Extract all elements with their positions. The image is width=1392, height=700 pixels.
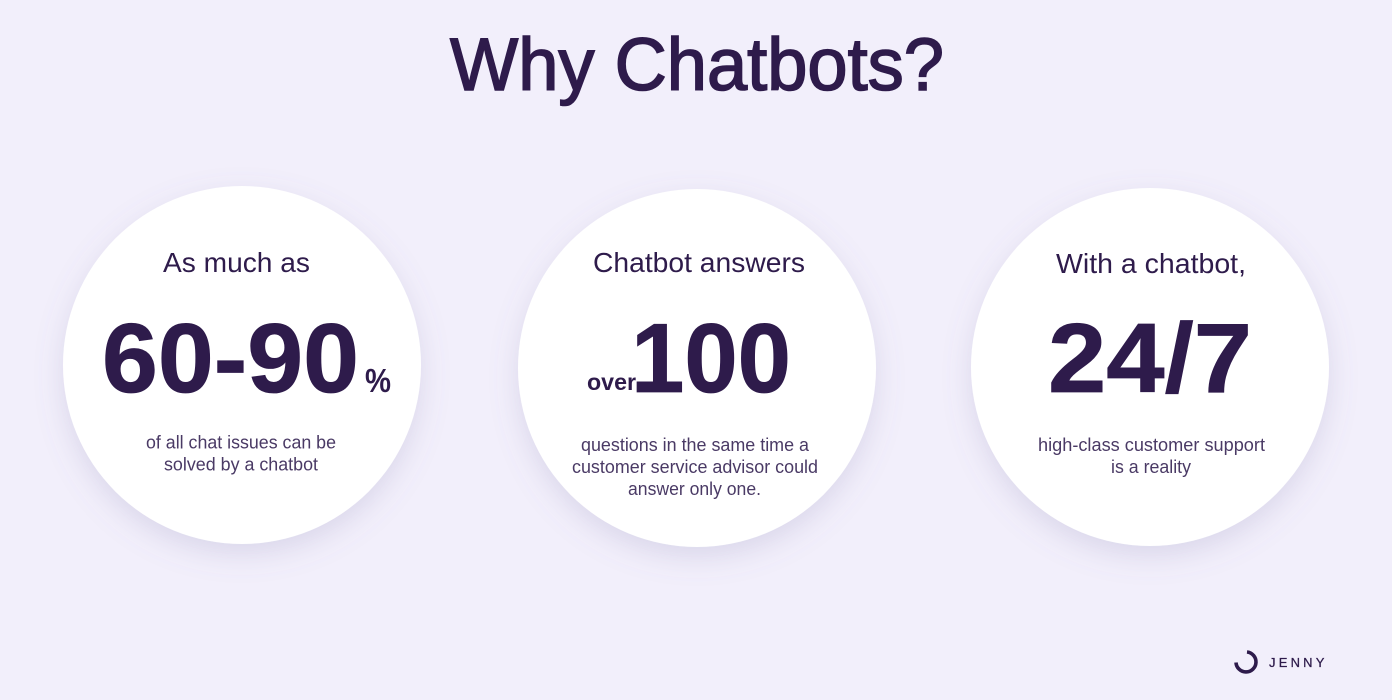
circle background (518, 189, 876, 547)
circle background (971, 188, 1329, 546)
panel: 60-90 percent (63, 186, 421, 544)
icon: open ring (1236, 652, 1256, 672)
description: high-class customer support (1038, 435, 1265, 455)
description (146, 432, 336, 474)
lead text: With a chatbot, (1056, 248, 1246, 279)
lead text: Chatbot answers (593, 247, 805, 278)
title: Why Chatbots? (450, 23, 944, 106)
description: questions in the same time a (581, 435, 810, 455)
logo: Jenny (1236, 652, 1328, 672)
over label: over (587, 369, 636, 395)
description: of all chat issues can be (146, 432, 336, 452)
lead text: As much as (163, 247, 310, 278)
percent sign: % (365, 362, 391, 399)
description (572, 435, 818, 499)
description (1038, 435, 1265, 477)
panel: over 100 (518, 189, 876, 547)
panel: 24/7 (971, 188, 1329, 546)
description: is a reality (1111, 457, 1191, 477)
big number: 24/7 (1048, 303, 1252, 413)
circle background (63, 186, 421, 544)
description: answer only one. (628, 479, 761, 499)
wordmark: JENNY (1269, 655, 1328, 670)
big number: 100 (631, 303, 791, 413)
description: customer service advisor could (572, 457, 818, 477)
big number: 60-90 (102, 303, 359, 413)
description: solved by a chatbot (164, 454, 318, 474)
